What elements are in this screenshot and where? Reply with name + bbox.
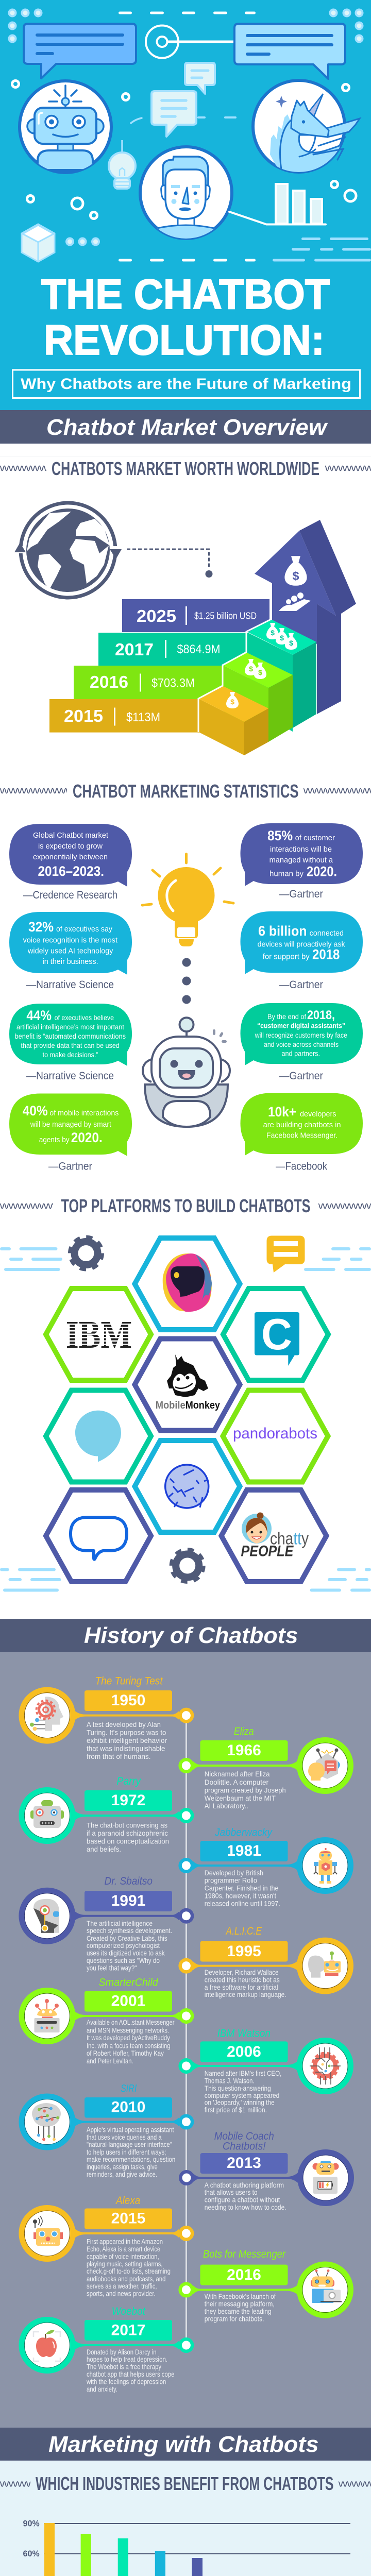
panel: header background: [0, 0, 371, 410]
heading band: Chatbot Market Overview: [0, 410, 371, 444]
icon: dot clusters: [8, 8, 364, 246]
icon: smiling robot: [143, 1018, 230, 1127]
icon: target connector: [146, 26, 233, 58]
stat bubble: customer digital assistants: “customer digital assistants”: [257, 1022, 345, 1030]
timeline entry: 2001: SmarterChild: [99, 1976, 159, 1989]
timeline entry: 1950: 1950: [111, 1692, 145, 1709]
timeline entry: 2013: that allows users to: [205, 2188, 258, 2196]
timeline entry: 2013: 2013: [227, 2155, 261, 2172]
timeline entry: 1950: that was indistinguishable: [87, 1744, 165, 1753]
timeline entry: 2013: [179, 2130, 354, 2211]
stat bubble: 85 percent: 85%: [267, 828, 293, 843]
stat bubble: 85 percent: of customer: [295, 834, 335, 842]
stat bubble: market growth: is expected to grow: [38, 842, 103, 851]
stat bubble: 40 percent: 40%: [23, 1103, 48, 1118]
stat bubble: customer digital assistants: and voice across channels: [264, 1041, 339, 1048]
platform hexagon: MobileMonkey: Mobile: [156, 1400, 185, 1411]
stat bubble: 6 billion: connected: [310, 929, 344, 938]
timeline entry: 2013: configure a chatbot without: [205, 2196, 280, 2204]
stat bubble: 85 percent: managed without a: [269, 856, 333, 865]
header illustration: [8, 8, 371, 262]
timeline entry: 2006: Named after IBM's first CEO,: [205, 2069, 281, 2077]
timeline entry: 2017: [19, 2306, 194, 2393]
platform hexagon: chatty people: PEOPLE: [241, 1543, 294, 1560]
platform hexagon: IBM: [46, 1289, 151, 1380]
timeline entry: 1950: exhibit intelligent behavior: [87, 1736, 167, 1744]
stat bubble: 32 percent: voice recognition is the most: [23, 936, 118, 945]
icon: chat bubble: [267, 1235, 305, 1273]
chart: market worth staircase: [49, 520, 356, 755]
year labels: [64, 606, 257, 725]
timeline entry: 2015: playing music, setting alarms,: [87, 2260, 163, 2268]
2015 block: $: [230, 698, 234, 706]
platform hexagon: C logo: C: [261, 1310, 292, 1359]
stat bubble: market growth: Global Chatbot market: [33, 831, 109, 840]
timeline entry: 2001: of Robert Hoffer, Timothy Kay: [87, 2049, 164, 2057]
year labels: $1.25 billion USD: [194, 611, 257, 621]
timeline entry: 2010: inqueries, assign tasks, give: [87, 2163, 158, 2171]
timeline entry: 1972: The chat-bot conversing as: [87, 1821, 167, 1829]
heading band: History of Chatbots: [0, 1619, 371, 1652]
stat bubble: 40 percent: 2020.: [71, 1130, 103, 1145]
year labels: 2017: [115, 640, 154, 659]
timeline entry: 1991: The artificial intelligence: [87, 1919, 153, 1927]
timeline entry: 2017: 2017: [111, 2321, 145, 2339]
timeline entry: 2015: 2015: [111, 2210, 145, 2227]
timeline entry: 2016: program for chatbots.: [205, 2314, 264, 2323]
timeline entry: 2017: The Woebot is a free therapy: [87, 2363, 161, 2371]
stat bubble: 10k developers: Facebook Messenger.: [266, 1131, 338, 1140]
timeline entry: 2015: First appeared in the Amazon: [87, 2238, 163, 2246]
icon: three dots: [182, 958, 191, 1004]
attribution: —Facebook: [276, 1161, 327, 1173]
timeline entry: 1966: Weizenbaum at the MIT: [205, 1794, 276, 1802]
icon: cube: [22, 224, 55, 262]
stat bubble: 85 percent: 2020.: [307, 863, 337, 879]
timeline entry: 2010: SIRI: [121, 2082, 137, 2095]
stat bubble: 6 billion: devices will proactively ask: [258, 940, 345, 949]
timeline entry: 2017: with the feelings of depression: [86, 2378, 166, 2386]
timeline entry: 1981: Carpenter. Finished in the: [205, 1884, 279, 1892]
timeline entry: 1972: if a paranoid schizophrenic: [87, 1829, 168, 1837]
timeline entry: 2010: to help users in different ways;: [87, 2148, 166, 2156]
stat bubble: 44 percent: of executives believe: [55, 1014, 114, 1022]
stat bubble: 10k developers: developers: [300, 1110, 336, 1118]
timeline entry: 1981: [178, 1827, 353, 1907]
timeline entry: 2017: hopes to help treat depression.: [87, 2355, 167, 2363]
timeline entry: 1972: Parry: [116, 1775, 141, 1787]
timeline entry: 1981: Jabberwacky: [214, 1827, 273, 1839]
stat bubble: 10k developers: 10k+: [268, 1104, 296, 1120]
platform hexagon: pandorabots: pandorabots: [233, 1425, 317, 1442]
timeline entry: 1972: [19, 1775, 194, 1853]
attribution: —Gartner: [279, 979, 323, 991]
platform hexagon: chatty people: [222, 1490, 327, 1582]
timeline entry: 1981: 1981: [227, 1842, 261, 1859]
timeline entry: 1981: released online until 1997.: [205, 1899, 280, 1907]
timeline entry: 2016: their messaging platform,: [205, 2300, 275, 2308]
timeline entry: 1991: Created by Creative Labs, this: [87, 1934, 167, 1942]
axis labels: 60%: [23, 2549, 40, 2558]
timeline entry: 1950: Turing. It's purpose was to: [87, 1728, 166, 1737]
stat bubble: customer digital assistants: [240, 1003, 363, 1065]
platform hexagon: chatty people: chatty: [270, 1529, 309, 1548]
icon: globe: [14, 503, 122, 598]
stat bubble: market growth: 2016–2023.: [38, 863, 104, 879]
timeline entry: 1966: AI Laboratory..: [205, 1802, 248, 1810]
icon: gear: [70, 1237, 102, 1269]
timeline entry: 2006: 2006: [227, 2043, 261, 2060]
attribution: —Narrative Science: [26, 979, 114, 991]
2015 block: [49, 686, 268, 755]
timeline entry: 2016: [178, 2248, 353, 2323]
timeline entry: 2013: needing to know how to code.: [205, 2203, 286, 2211]
panel: industries background: [0, 2461, 371, 2576]
attribution: —Gartner: [279, 888, 323, 900]
grid lines: [44, 2523, 350, 2576]
2017 block: [98, 619, 316, 732]
2017 block: $: [271, 629, 275, 637]
timeline entry: 1981: programmer Rollo: [205, 1876, 257, 1885]
timeline entry: 2006: Thomas J. Watson.: [205, 2076, 255, 2084]
timeline entry: 2010: reminders, and give advice.: [87, 2170, 157, 2178]
stat bubble: 85 percent: [240, 823, 363, 886]
title: [41, 271, 330, 364]
stat bubble: 44 percent: to make decisions.”: [43, 1051, 98, 1059]
timeline entry: 2010: Apple's virtual operating assistant: [87, 2126, 174, 2134]
heading band: History of Chatbots: History of Chatbots: [84, 1623, 298, 1648]
timeline entry: 2001: and Peter Levitan.: [87, 2057, 133, 2065]
2016 block: [74, 652, 293, 742]
stat bubble: 6 billion: 2018: [312, 947, 340, 962]
timeline entry: 2016: they became the leading: [205, 2307, 272, 2315]
timeline entry: 2016: With Facebook's launch of: [205, 2292, 276, 2300]
year labels: 2025: [137, 606, 176, 625]
stat bubble: 32 percent: of executives say: [56, 925, 112, 934]
stat bubble: 40 percent: of mobile interactions: [49, 1109, 119, 1117]
timeline entry: 2006: first price of $1 million.: [205, 2106, 267, 2114]
year labels: $703.3M: [151, 676, 195, 690]
icon: man portrait: [140, 147, 232, 242]
timeline entry: 2006: computer system appeared: [205, 2091, 279, 2099]
stat bubble: market growth: [9, 824, 132, 887]
timeline entry: 2010: that uses voice queries and a: [87, 2133, 162, 2141]
timeline entry: 2015: Echo, Alexa is a smart device: [87, 2245, 160, 2253]
timeline entry: 1966: program created by Joseph: [205, 1786, 286, 1794]
bar chart: industries: [21, 2518, 350, 2576]
stat bubble: 32 percent: widely used AI technology: [27, 947, 113, 956]
timeline entry: 1995: Developer, Richard Wallace: [205, 1968, 279, 1976]
timeline entry: 1972: based on conceptualization: [87, 1837, 169, 1845]
stat bubble: 6 billion: for support by: [263, 953, 310, 961]
icon: unicorn portrait: [253, 80, 360, 178]
timeline entry: 1991: you feel that way?": [87, 1964, 137, 1972]
timeline entry: 1966: 1966: [227, 1742, 261, 1759]
2017 block: $: [289, 639, 293, 647]
timeline entry: 1950: from that of humans.: [87, 1752, 150, 1760]
icon: bar chart: [229, 184, 326, 225]
timeline entry: 1972: 1972: [111, 1792, 145, 1809]
timeline entry: 2010: make recommendations, question: [87, 2155, 175, 2163]
title: THE CHATBOT: [41, 271, 330, 318]
timeline entry: 2001: Inc. with a focus team consisting: [87, 2041, 171, 2049]
timeline entry: 2013: A chatbot authoring platform: [205, 2181, 284, 2189]
2017 block: $: [280, 634, 284, 642]
timeline entry: 1991: questions such as "Why do: [87, 1956, 160, 1964]
stat bubble: 40 percent: agents by: [39, 1136, 70, 1144]
year labels: $113M: [126, 710, 160, 724]
attribution: —Gartner: [48, 1161, 92, 1173]
stat bubble: 10k developers: [240, 1093, 363, 1156]
platform hexagon: IBM: IBM: [66, 1313, 132, 1357]
timeline entry: 2015: capable of voice interaction,: [87, 2252, 159, 2261]
timeline entry: 2015: Alexa: [115, 2195, 140, 2207]
axis labels: [23, 2518, 40, 2576]
timeline entry: 2006: This question-answering: [205, 2084, 271, 2092]
icon: light bulb: [109, 140, 136, 189]
timeline entry: 2015: sports, and news provider.: [87, 2290, 156, 2298]
platform hexagon: blue globe: [135, 1440, 240, 1532]
stat bubble: customer digital assistants: 2018,: [307, 1008, 335, 1022]
subtitle box: Why Chatbots are the Future of Marketing: [21, 376, 351, 393]
timeline spine: [185, 1716, 187, 2345]
bars: [44, 2523, 350, 2576]
timeline entry: 2001: and MSN Messenging networks.: [87, 2026, 169, 2034]
stat bubble: 32 percent: 32%: [28, 919, 54, 935]
timeline entry: 2006: IBM Watson: [217, 2028, 271, 2040]
platform hexagon: C logo: [223, 1289, 328, 1380]
timeline entry: 2001: Available on AOL.stant Messenger: [87, 2018, 175, 2026]
timeline entry: 2001: [19, 1976, 194, 2065]
stat bubble: 40 percent: will be managed by smart: [30, 1120, 112, 1129]
year labels: 2015: [64, 706, 103, 725]
stat bubble: 32 percent: in their business.: [43, 957, 98, 966]
2016 block: $: [258, 668, 262, 676]
stat bubble: 44 percent: artificial intelligence’s most important: [16, 1023, 124, 1031]
stat bubble: market growth: exponentially between: [33, 853, 108, 861]
timeline entry: 1995: created this heuristic bot as: [205, 1975, 280, 1984]
stat bubble: customer digital assistants: and partners.: [281, 1050, 320, 1058]
year labels: 2016: [90, 672, 128, 691]
timeline entry: 2016: 2016: [227, 2266, 261, 2283]
timeline entry: 1966: [178, 1726, 353, 1810]
axis labels: 90%: [23, 2518, 40, 2528]
timeline entry: 2017: chatbot app that helps users cope: [87, 2370, 175, 2378]
timeline entry: 1991: speech synthesis development.: [87, 1926, 172, 1935]
timeline entry: 2010: "natural-language user interface": [87, 2140, 172, 2148]
timeline entry: 1991: uses its digitized voice to ask: [87, 1949, 165, 1957]
timeline entry: 2006: on 'Jeopardy,' winning the: [205, 2098, 275, 2106]
platform hexagon: hooded chat logo: [135, 1238, 240, 1330]
icon: right speech bubble: [234, 24, 345, 79]
timeline entry: 2013: Mobile Coach: [214, 2130, 274, 2142]
attribution: —Narrative Science: [26, 1070, 114, 1082]
stat bubble: 85 percent: interactions will be: [270, 845, 332, 854]
stat bubble: 10k developers: are building chatbots in: [263, 1121, 341, 1129]
timeline entry: 2015: serves as a weather, traffic,: [87, 2282, 157, 2290]
stat bubble: customer digital assistants: will recognize customers by face: [255, 1031, 347, 1039]
title: REVOLUTION:: [44, 317, 325, 364]
timeline entry: 2013: Chatbots!: [223, 2140, 266, 2153]
timeline entry: 1981: 1980s, however, it wasn't: [205, 1892, 276, 1900]
platform hexagon: outlined bubble: [46, 1490, 151, 1582]
icon: small chat bubbles: [151, 63, 215, 137]
timeline entry: 1991: computerized psychologist: [87, 1941, 160, 1950]
timeline entry: 1966: Eliza: [234, 1726, 254, 1738]
2016 block: $: [249, 665, 253, 673]
timeline entry: 1995: a free software for artificial: [205, 1983, 278, 1991]
timeline entry: 1966: Doolittle. A computer: [205, 1778, 268, 1786]
subtitle box: [12, 370, 360, 398]
timeline entry: 1966: Nicknamed after Eliza: [205, 1770, 270, 1778]
icon: small white rings: [12, 80, 356, 218]
attribution: —Gartner: [279, 1070, 323, 1082]
timeline entry: 2010: 2010: [111, 2099, 145, 2116]
icon: left speech bubble: [24, 24, 136, 78]
timeline entry: 1950: [19, 1675, 194, 1760]
stat bubble: 44 percent: [9, 1004, 132, 1066]
heading band: Chatbot Market Overview: Chatbot Market Overview: [46, 415, 328, 440]
timeline entry: 1972: and beliefs.: [87, 1845, 121, 1853]
heading band: Marketing with Chatbots: Marketing with Chatbots: [48, 2432, 318, 2457]
timeline entry: 1995: A.L.I.C.E: [225, 1925, 262, 1937]
timeline entry: 2017: Woebot: [112, 2306, 146, 2317]
platform hexagon: pandorabots: [223, 1390, 328, 1482]
icon: robot portrait: [20, 81, 111, 173]
timeline entry: 2001: It was developed byActiveBuddy: [87, 2033, 170, 2042]
year labels: $864.9M: [177, 642, 221, 656]
stat bubble: 44 percent: that provide data that can be used: [21, 1042, 120, 1049]
timeline entry: 1995: 1995: [227, 1943, 261, 1960]
stat bubble: 44 percent: benefit is “automated communications: [14, 1032, 126, 1040]
stat bubble: 6 billion: 6 billion: [258, 923, 307, 939]
2025 block and arrow: [122, 520, 356, 714]
timeline entry: 1991: Dr. Sbaitso: [104, 1875, 153, 1887]
timeline entry: 2015: [19, 2195, 194, 2298]
timeline entry: 1991: [19, 1875, 194, 1972]
dashed connector: [127, 549, 212, 578]
timeline entry: 1950: The Turing Test: [95, 1675, 163, 1687]
stat bubble: 40 percent: [9, 1093, 132, 1156]
heading band: Marketing with Chatbots: [0, 2428, 371, 2461]
platform hexagon: MobileMonkey: Monkey: [185, 1400, 221, 1411]
platform hexagon: blue bubble: [46, 1390, 151, 1482]
timeline entry: 1991: 1991: [111, 1892, 145, 1909]
icon: light bulb: [142, 854, 233, 946]
timeline entry: 1995: [178, 1925, 353, 1998]
stat bubble: customer digital assistants: By the end of: [267, 1013, 306, 1021]
timeline entry: 2017: and anxiety.: [87, 2385, 117, 2393]
timeline entry: 2006: [178, 2028, 353, 2114]
timeline entry: 2010: [19, 2082, 194, 2178]
attribution: —Credence Research: [23, 889, 117, 901]
timeline entry: 2016: Bots for Messenger: [203, 2248, 286, 2260]
timeline entry: 2015: check.g-off to-do lists, streaming: [87, 2267, 171, 2275]
timeline entry: 1981: Developed by British: [205, 1869, 263, 1877]
stat bubble: 32 percent: [9, 912, 132, 975]
timeline entry: 1950: A test developed by Alan: [87, 1720, 161, 1728]
panel: history background: [0, 1652, 371, 2428]
stat bubble: 6 billion: [240, 911, 363, 974]
timeline entry: 2017: Donated by Alison Darcy in: [87, 2348, 157, 2356]
stat bubble: 85 percent: human by: [269, 870, 304, 878]
timeline entry: 2001: 2001: [111, 1993, 145, 2009]
stat bubble: 44 percent: 44%: [26, 1008, 52, 1023]
timeline entry: 1995: intelligence markup language.: [205, 1990, 286, 1998]
timeline entry: 2015: audiobooks and podcasts, and: [87, 2275, 165, 2283]
2025 block and arrow: $: [292, 569, 299, 583]
platform hexagon: MobileMonkey: [135, 1338, 240, 1430]
icon: gear: [171, 1550, 204, 1582]
decorative dashes: [0, 1247, 371, 1592]
